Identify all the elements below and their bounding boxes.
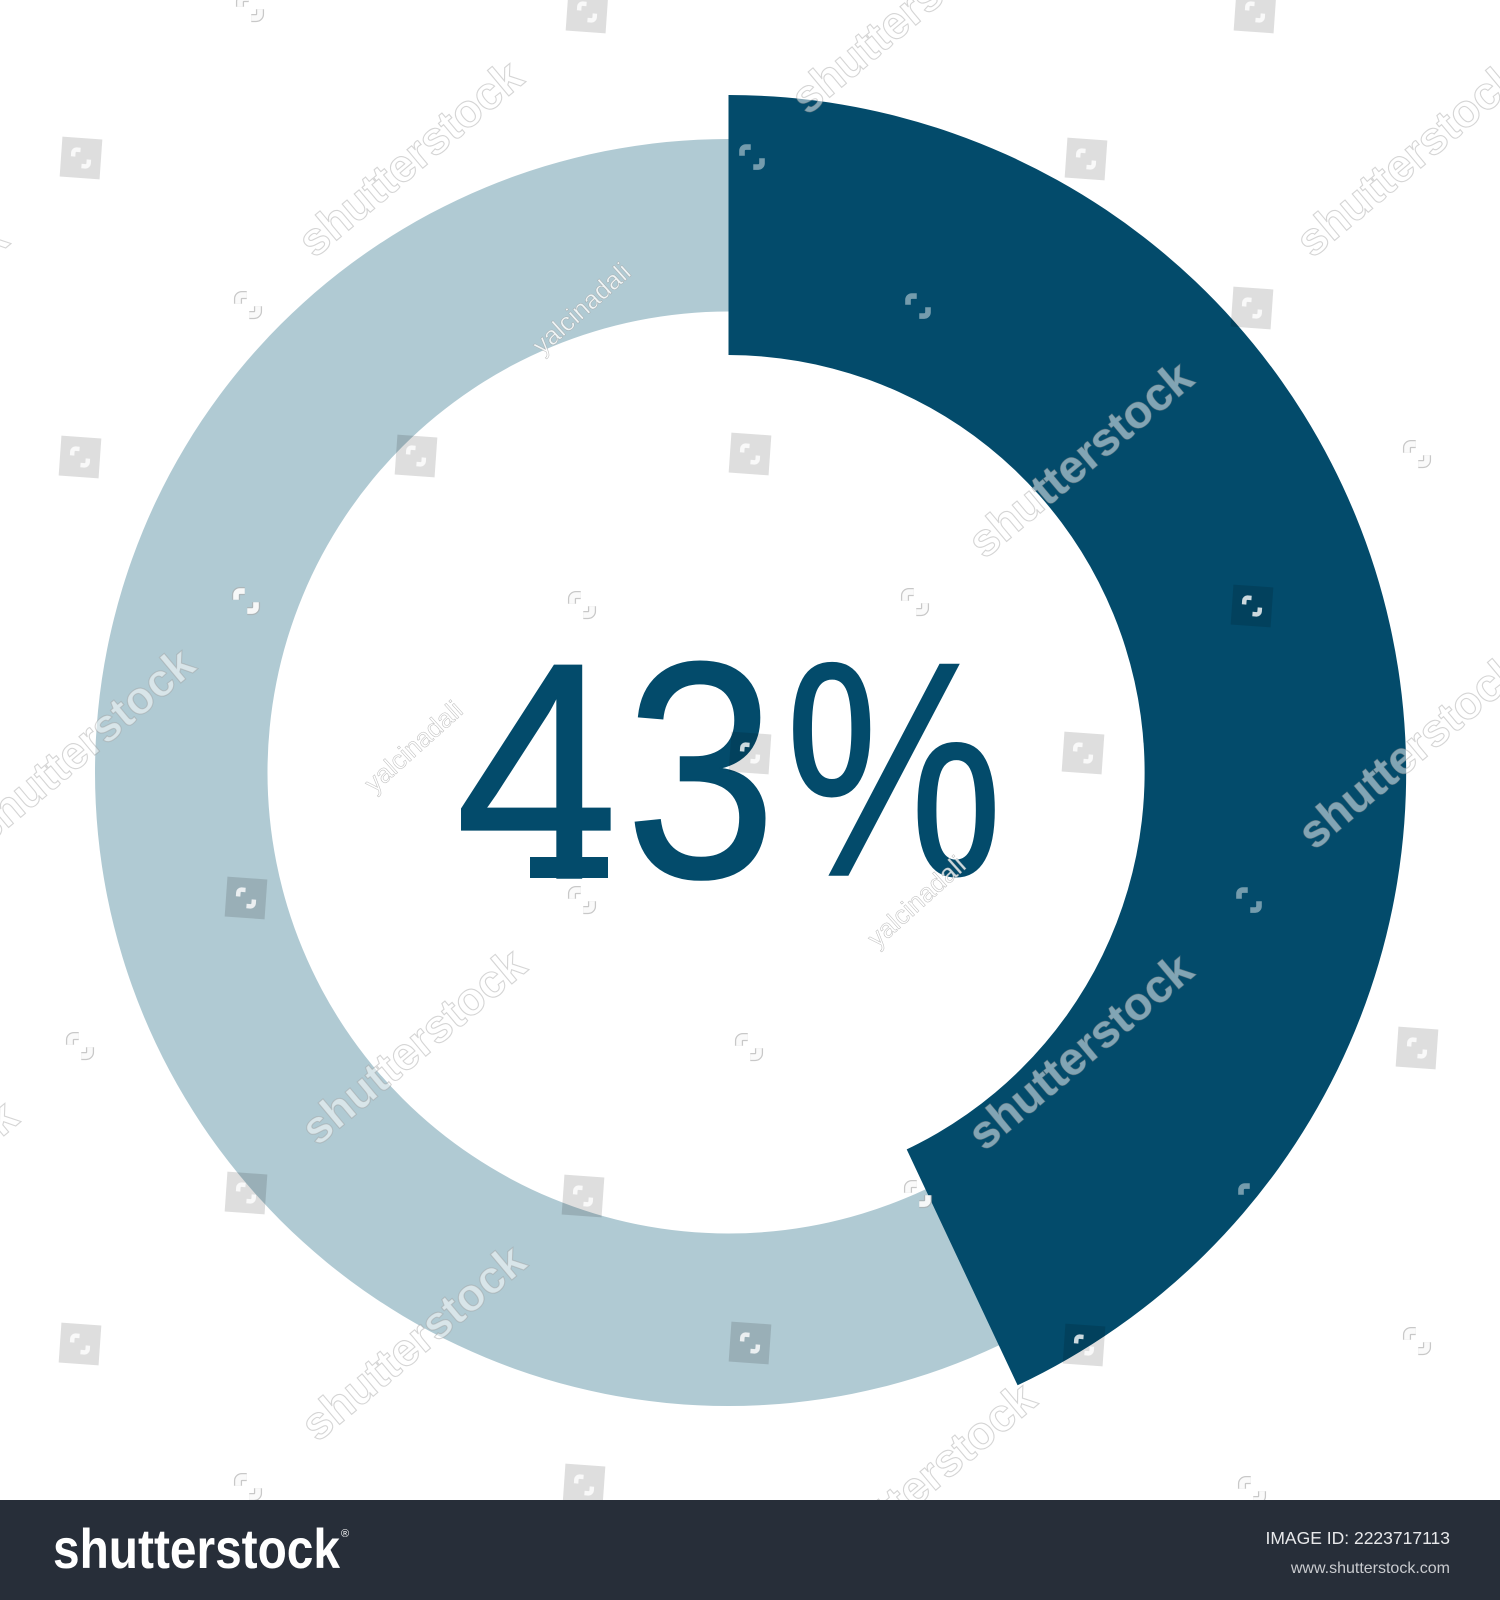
footer image id: IMAGE ID: 2223717113 xyxy=(1265,1528,1450,1548)
watermark: repeated stock wordmarks: shutterstock xyxy=(288,49,533,267)
watermark: repeated stock wordmarks: shutterstock xyxy=(291,937,536,1155)
ring: remaining 57 percent track xyxy=(95,139,1362,1406)
footer logo wordmark: shutterstock xyxy=(53,1517,341,1580)
watermark: contributor name: yalcinadali xyxy=(861,849,971,953)
watermark: repeated stock wordmarks: shutterstock xyxy=(958,350,1203,568)
value label: 43%: % xyxy=(785,598,1003,940)
value label: 43%: 4 xyxy=(455,598,619,944)
arc: highlighted 43 percent segment xyxy=(728,95,1406,1385)
footer bar xyxy=(0,1500,1500,1600)
value label: 43% xyxy=(455,597,1003,944)
watermark: contributor name xyxy=(358,256,971,953)
chart: 43 percent donut xyxy=(95,95,1406,1406)
watermark: contributor name: yalcinadali xyxy=(358,694,468,798)
watermark: repeated stock wordmarks: shutterstock xyxy=(291,1233,536,1451)
footer registered mark: ® xyxy=(341,1528,349,1540)
watermark: repeated stock wordmarks: shutterstock xyxy=(958,942,1203,1160)
watermark: repeated stock wordmarks: shutterstock xyxy=(801,1371,1046,1589)
footer website: www.shutterstock.com xyxy=(1290,1560,1450,1577)
value label: 43%: 3 xyxy=(625,597,777,943)
watermark: contributor name: yalcinadali xyxy=(526,256,636,360)
